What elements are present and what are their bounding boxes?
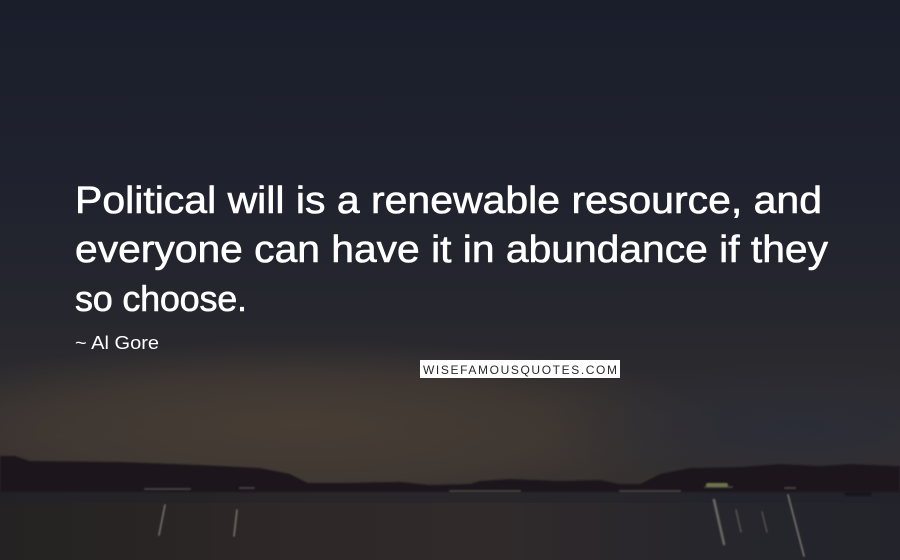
- quote text: so choose.: [75, 278, 247, 319]
- author attribution: ~ Al Gore: [75, 333, 159, 353]
- quote text: everyone can have it in abundance if they: [75, 229, 828, 271]
- shoreline lights and water reflections: [145, 485, 870, 556]
- far hills silhouette: [0, 456, 900, 492]
- quote text: Political will is a renewable resource, and: [75, 180, 822, 222]
- lake water: [0, 491, 900, 560]
- quote text: [75, 180, 828, 319]
- watermark badge: WISEFAMOUSQUOTES.COM: [423, 363, 617, 377]
